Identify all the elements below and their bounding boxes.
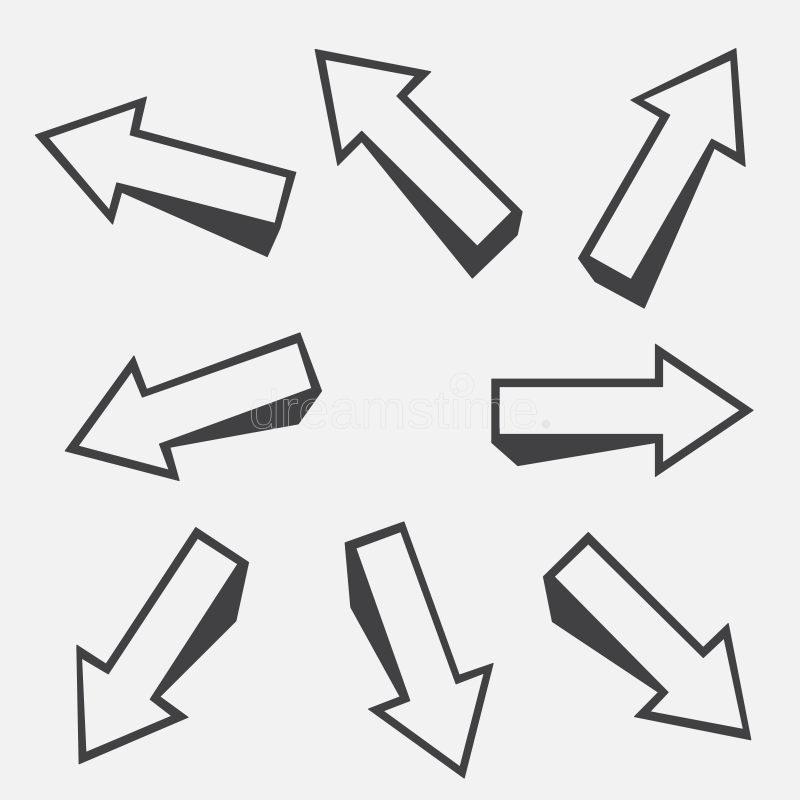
arrow: pointing southwest, bottom left — [77, 527, 249, 764]
arrow: pointing south-southeast, bottom centre — [345, 522, 493, 778]
arrow: pointing southeast, bottom right — [543, 532, 751, 740]
arrow: pointing east, middle right — [492, 344, 753, 477]
arrow: pointing northwest, top centre — [315, 49, 522, 278]
watermark: dreamstime: dreamstime — [249, 380, 539, 440]
arrow: pointing west-northwest, top left — [35, 97, 296, 257]
arrow: pointing northeast, top right — [578, 48, 745, 308]
arrow: pointing west-southwest, middle left — [65, 333, 322, 481]
